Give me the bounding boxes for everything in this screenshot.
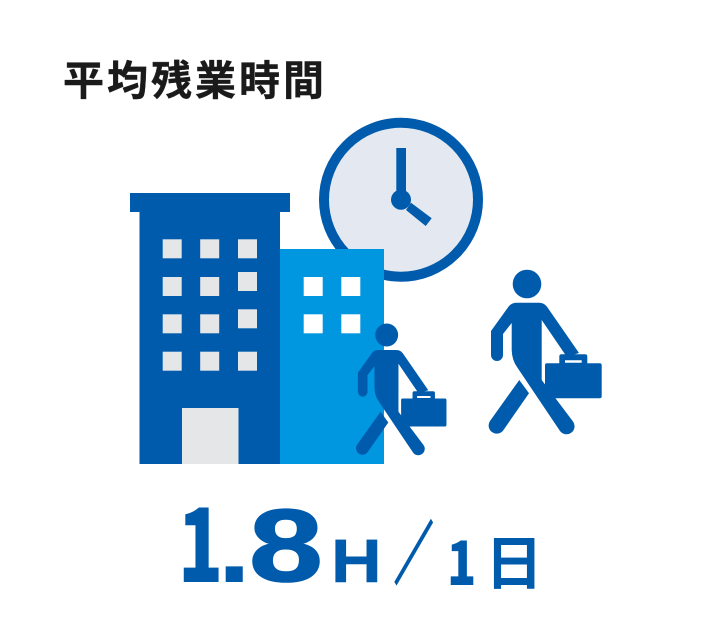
icon: low building: [280, 249, 384, 464]
value: 1.8H per 1 day: [178, 467, 543, 612]
icon: tall office building: [130, 193, 290, 464]
value: 1.8H per 1 day: 1: [178, 467, 223, 612]
icon: large walking person with briefcase: [489, 270, 602, 434]
icon: small walking person with briefcase: [356, 324, 446, 455]
value: 1.8H per 1 day: ／: [394, 517, 433, 593]
value: 1.8H per 1 day: 1: [447, 515, 476, 603]
value: 1.8H per 1 day: 日: [485, 532, 543, 597]
title: 平均残業時間: [63, 58, 327, 104]
icon: clock: [324, 123, 478, 277]
value: 1.8H per 1 day: 8: [249, 488, 323, 604]
value: 1.8H per 1 day: .: [218, 487, 251, 604]
value: 1.8H per 1 day: H: [331, 526, 382, 595]
